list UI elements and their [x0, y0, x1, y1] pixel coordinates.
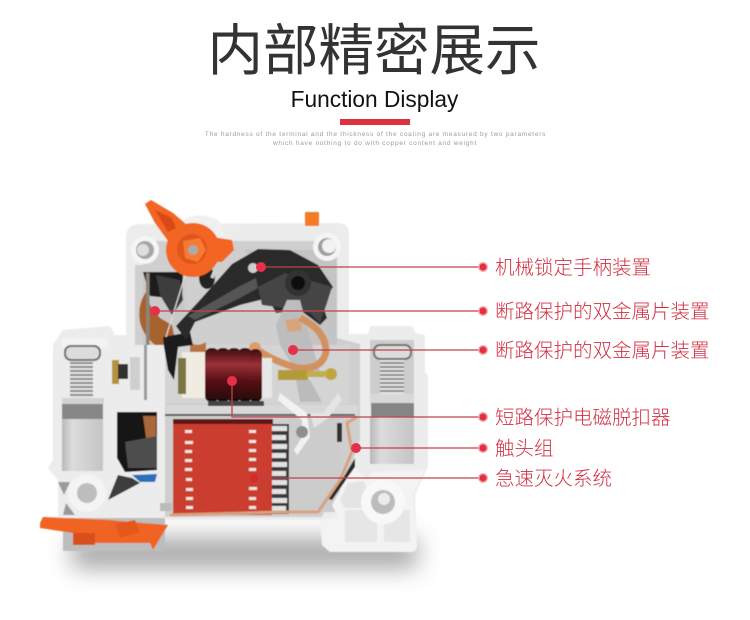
- subtitle: Function Display: [291, 86, 459, 112]
- title: 内部精密展示: [207, 20, 541, 82]
- product shadow: [72, 538, 417, 568]
- upper dark mechanism cavity: [139, 272, 206, 400]
- lower left arc chamber: [108, 412, 157, 500]
- callout: short-circuit magnetic release: 短路保护电磁脱扣器: [495, 407, 671, 429]
- callout: bimetal device upper: [150, 301, 710, 323]
- orange DIN clip: [40, 517, 168, 550]
- black latch arm: [163, 332, 193, 380]
- callout: mechanical lock handle device: 机械锁定手柄装置: [495, 257, 651, 279]
- black lever: [176, 249, 333, 340]
- callout: mechanical lock handle device: [256, 257, 651, 279]
- callout: short-circuit magnetic release: [227, 376, 671, 429]
- callout: contact group: 触头组: [495, 438, 554, 460]
- description text: The hardness of the terminal and the thickness of the coating are measured by two parameters: [205, 131, 546, 138]
- callout: bimetal device upper: 断路保护的双金属片装置: [495, 301, 710, 323]
- lower right foot: [320, 467, 425, 552]
- callout: bimetal device lower: 断路保护的双金属片装置: [495, 340, 710, 362]
- callout: bimetal device lower: [288, 340, 710, 362]
- orange indicator button: [305, 212, 319, 226]
- copper contact strip: [170, 417, 357, 515]
- callout: rapid arc extinguishing system: [250, 468, 612, 490]
- description text: which have nothing to do with copper content and weight: [272, 140, 477, 147]
- accent bar: [340, 119, 410, 125]
- interior cavity: [135, 241, 360, 517]
- callout: contact group: [351, 438, 554, 460]
- right terminal: [370, 340, 414, 464]
- left terminal: [62, 338, 140, 471]
- left grey foot under clip: [63, 518, 165, 551]
- upper left corner screw hole: [131, 236, 159, 264]
- link wire: [166, 250, 193, 337]
- bobbin: [182, 352, 207, 398]
- magnetic coil: [205, 348, 262, 402]
- description text: [205, 131, 546, 147]
- right contact and copper braid: [249, 300, 337, 402]
- white boss behind handle: [176, 215, 226, 236]
- circuit breaker cutaway: [40, 200, 428, 552]
- upper right corner screw hole: [313, 233, 341, 261]
- white housing: [48, 223, 428, 552]
- black oval behind lever: [199, 267, 215, 289]
- trip hook: [278, 393, 310, 455]
- orange handle: [145, 200, 234, 277]
- arc extinguishing red plates: [160, 419, 289, 515]
- lower left screw hole: [58, 474, 106, 515]
- callout: rapid arc extinguishing system: 急速灭火系统: [495, 468, 612, 490]
